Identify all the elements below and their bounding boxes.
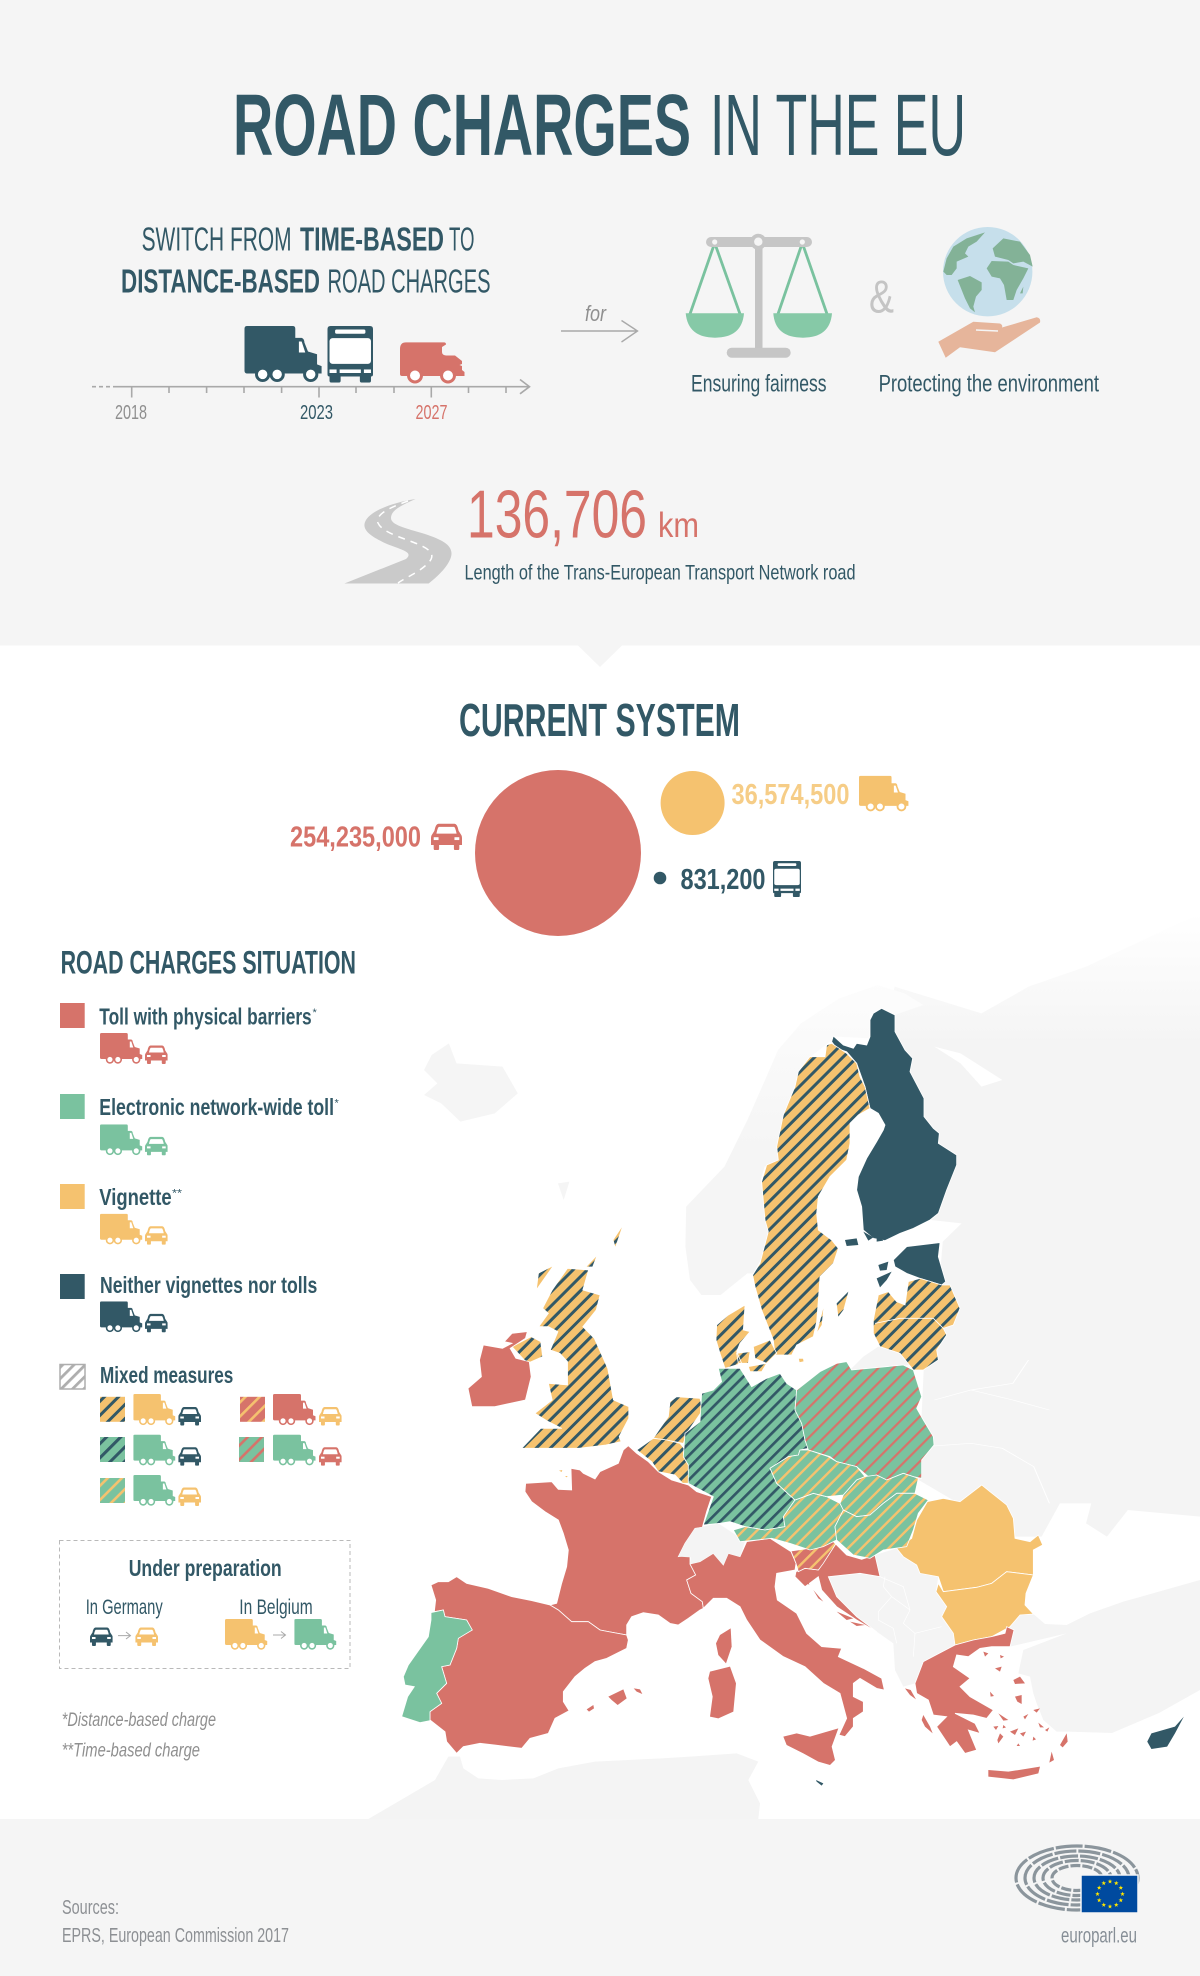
country: Romania: [897, 1485, 1043, 1592]
footnotes: *Distance-based charge: [62, 1709, 216, 1731]
panel: header band: [0, 0, 1200, 667]
country: Portugal: [402, 1610, 472, 1723]
stat: network length: [464, 477, 856, 585]
icon: EU flag: [1081, 1875, 1138, 1913]
country: Finland: [832, 1008, 957, 1241]
year labels: 2027: [416, 402, 448, 424]
country: Slovakia: [840, 1473, 918, 1517]
subheading: switch from time-based to distance-based: ROAD CHARGES: [328, 263, 490, 300]
country: Ireland: [468, 1332, 531, 1407]
country: Austria: [733, 1493, 843, 1550]
footnotes: [62, 1709, 216, 1762]
icon: hemicycle: [1016, 1846, 1138, 1910]
country: Latvia and Lithuania: [873, 1278, 960, 1370]
footnotes: **Time-based charge: [62, 1740, 200, 1762]
legend: neither vignettes nor tolls: Neither vignettes nor tolls: [100, 1272, 317, 1298]
country: Croatia: [795, 1544, 880, 1632]
country: Cyprus: [1147, 1717, 1184, 1749]
country: Switzerland: [678, 1523, 745, 1565]
stat: network length: Length of the Trans-European Transport Network road: [464, 561, 856, 585]
country: Poland: [795, 1362, 934, 1480]
country: Netherlands: [653, 1397, 703, 1443]
sources: Sources:: [62, 1897, 119, 1919]
subheading: switch from time-based to distance-based: [121, 220, 490, 300]
legend: mixed measures: [60, 1362, 342, 1506]
year labels: 2023: [300, 402, 333, 424]
map: eastern land (non-EU): [882, 913, 1200, 1537]
heading: road charges situation: ROAD CHARGES SITUATION: [61, 944, 356, 980]
icon: truck: [244, 326, 322, 381]
legend: toll with physical barriers: *: [312, 1007, 318, 1019]
country: Cyprus: [1173, 1469, 1175, 1471]
icon: scales: [686, 234, 832, 358]
country: Balearic islands: [587, 1688, 642, 1712]
label: protecting the environment: Protecting the environment: [879, 370, 1099, 397]
subheading: switch from time-based to distance-based: DISTANCE-BASED: [121, 263, 320, 300]
panel: under preparation: [60, 1540, 350, 1668]
label: buses: 831,200: [680, 864, 766, 896]
country: Greek islands: [905, 1652, 1068, 1779]
year labels: [115, 402, 448, 424]
country: Sweden: [753, 1043, 870, 1355]
mixed: green and dark: [100, 1435, 201, 1466]
country: Estonia: [893, 1243, 946, 1285]
country: Greece: [915, 1627, 1014, 1753]
sources: [62, 1897, 289, 1947]
legend: mixed measures: Mixed measures: [100, 1362, 233, 1388]
map of Europe: [368, 913, 1200, 1819]
country: Aland islands: [845, 1232, 883, 1246]
legend: toll with physical barriers: Toll with physical barriers: [99, 1003, 312, 1029]
map: United Kingdom and Ireland: [468, 1227, 629, 1448]
icon: bus: [328, 326, 373, 383]
label: lorries: 36,574,500: [732, 779, 850, 811]
country: Sardinia: [708, 1667, 736, 1718]
country: Sicily: [783, 1728, 838, 1765]
bubble: buses: [654, 872, 666, 884]
in Germany: In Germany: [86, 1596, 163, 1619]
legend: vignette: Vignette: [99, 1184, 172, 1210]
axis: [92, 380, 530, 398]
bubble chart: vehicle numbers: [290, 770, 908, 936]
subheading: switch from time-based to distance-based: SWITCH FROM: [142, 220, 292, 258]
legend: electronic network-wide toll: [60, 1094, 340, 1155]
legend: electronic network-wide toll: Electronic network-wide toll: [99, 1094, 334, 1120]
bubble: cars: [475, 770, 641, 936]
bubble: lorries: [661, 771, 725, 835]
country: Denmark: [716, 1305, 804, 1372]
legend: neither vignettes nor tolls: [60, 1272, 317, 1332]
in Belgium: In Belgium: [239, 1596, 313, 1619]
arrow: for: [561, 301, 638, 342]
label: cars: 254,235,000: [290, 822, 421, 854]
title: ROAD CHARGES: [233, 77, 691, 174]
country: Hungary: [835, 1493, 928, 1558]
country: Slovenia: [791, 1540, 836, 1572]
title: IN THE EU: [710, 77, 966, 174]
heading: current system: CURRENT SYSTEM: [459, 694, 740, 746]
legend: toll with physical barriers: [60, 1003, 318, 1064]
legend: electronic network-wide toll: *: [334, 1098, 340, 1110]
icon: globe in hand: [938, 227, 1040, 358]
icon: road: [344, 499, 452, 584]
logo text: europarl.eu: [1061, 1925, 1137, 1948]
year labels: 2018: [115, 402, 147, 424]
mixed: green and yellow: [100, 1475, 201, 1506]
arrow: for: for: [585, 301, 607, 326]
map: Germany, Benelux and central Europe: [402, 1446, 712, 1753]
country: Spain: [430, 1577, 628, 1753]
country: Italy: [687, 1538, 884, 1737]
map: Nordic and Baltic countries: [716, 1008, 960, 1372]
country: France: [525, 1446, 712, 1635]
mixed: green and red: [239, 1435, 342, 1466]
stat: network length: km: [658, 506, 699, 545]
country: United Kingdom: [512, 1268, 629, 1448]
country: Belgium and Luxembourg: [637, 1438, 688, 1483]
subheading: switch from time-based to distance-based: TIME-BASED: [300, 220, 444, 258]
country: Corsica: [716, 1628, 732, 1663]
legend: vignette: [60, 1184, 183, 1245]
mixed: yellow and dark: [100, 1394, 201, 1426]
legend: vignette: **: [172, 1188, 183, 1200]
timeline: [92, 326, 530, 424]
country: Channel islands: [559, 1470, 568, 1477]
country: Czechia: [770, 1450, 865, 1500]
country: Bulgaria: [936, 1572, 1033, 1645]
country: Scottish islands: [537, 1227, 622, 1288]
subheading: switch from time-based to distance-based: TO: [449, 220, 474, 258]
logo: European Parliament: [1016, 1846, 1138, 1948]
land: Kaliningrad: [850, 1347, 910, 1370]
in Germany: [86, 1596, 163, 1646]
sources: EPRS, European Commission 2017: [62, 1925, 289, 1947]
icon: van: [400, 342, 464, 382]
ampersand: &: [869, 270, 894, 322]
label: ensuring fairness: Ensuring fairness: [691, 370, 826, 397]
stat: network length: 136,706: [467, 477, 647, 553]
in Belgium: [225, 1596, 336, 1649]
map: north Africa, Turkey and Balkan land: [368, 1753, 760, 1819]
mixed: red and yellow: [240, 1394, 342, 1426]
panel: under preparation: Under preparation: [129, 1555, 282, 1581]
country: Gotland and Oland: [817, 1292, 848, 1332]
panel: footer: [0, 1819, 1200, 1976]
map: Iceland and Norway: [424, 985, 923, 1295]
country: Germany: [683, 1368, 808, 1530]
country: Estonian islands: [877, 1262, 892, 1287]
country: Malta: [816, 1780, 823, 1786]
country: Croatian islands: [807, 1575, 865, 1626]
